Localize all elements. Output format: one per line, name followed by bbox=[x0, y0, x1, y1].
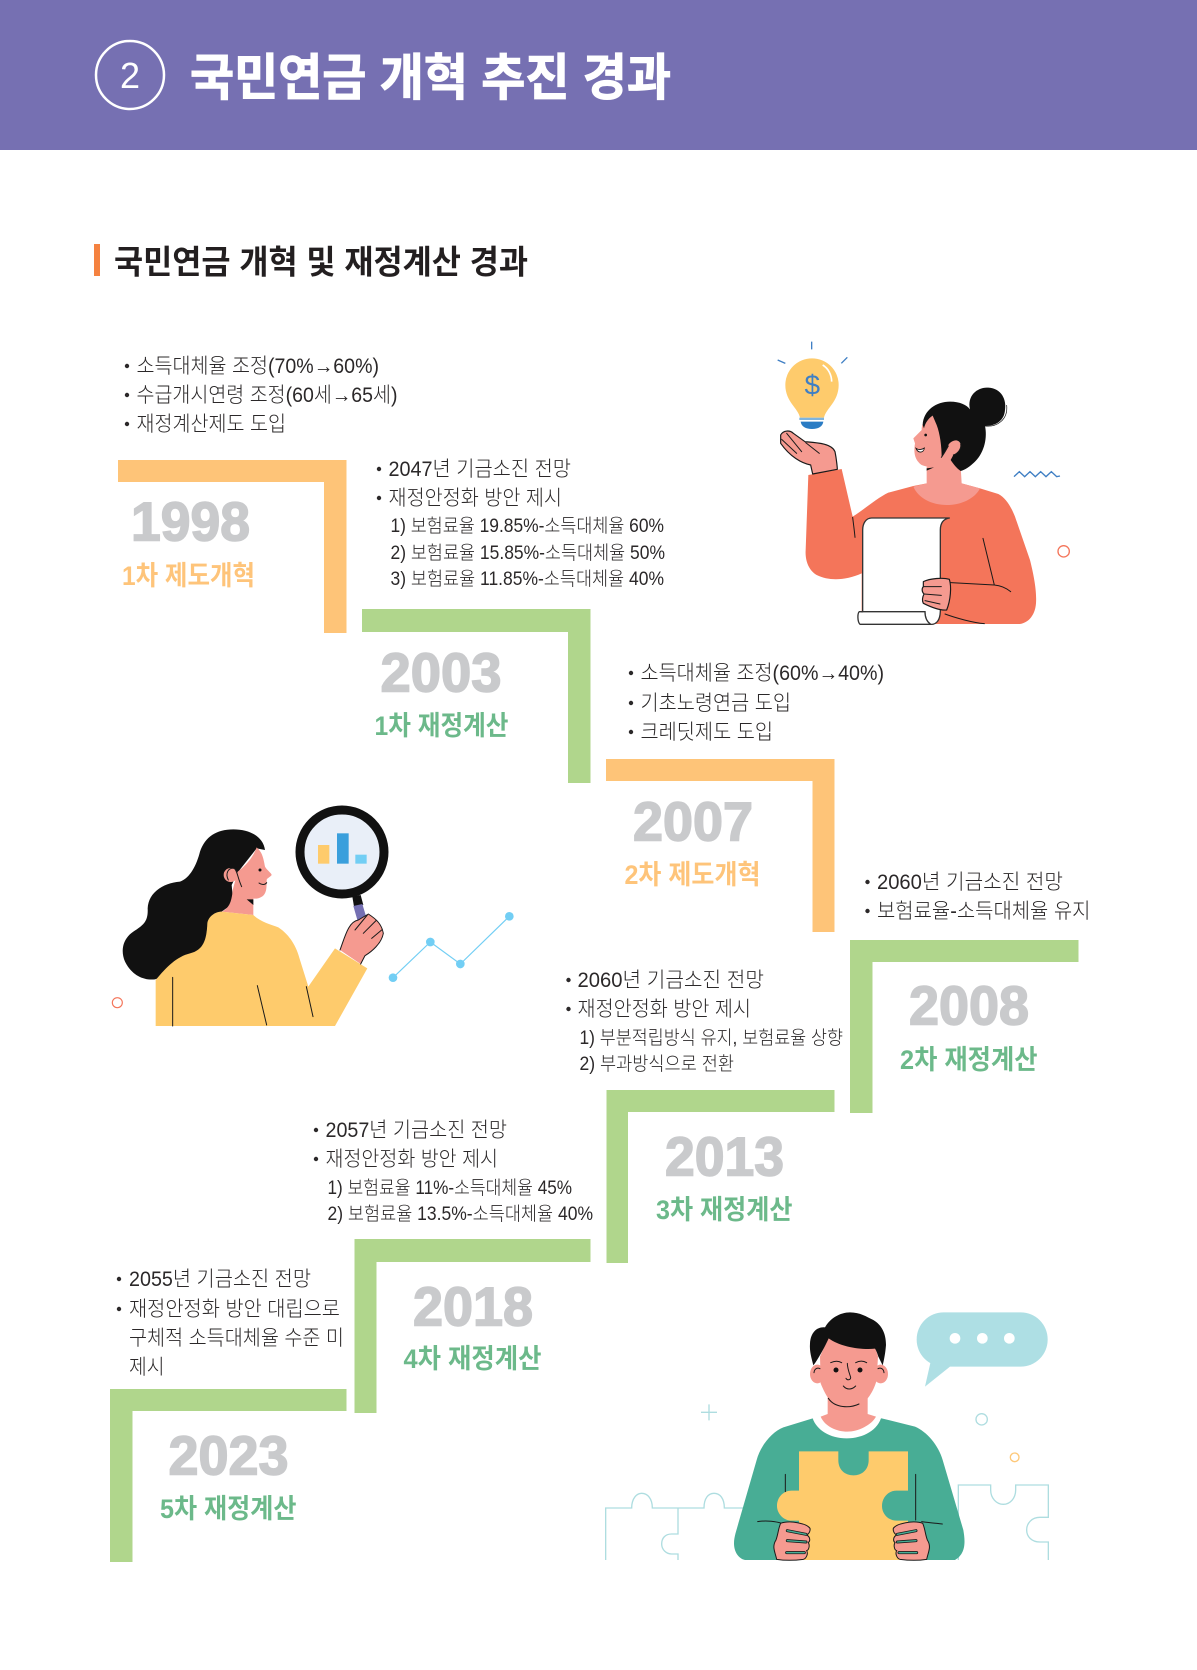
notes 2018: 재정안정화 방안 제시 bbox=[326, 1148, 498, 1171]
bracket 1998 bbox=[118, 460, 346, 633]
magnifier bbox=[300, 810, 384, 923]
label 2023: 5차 재정계산 bbox=[160, 1494, 297, 1524]
collar bbox=[813, 1415, 882, 1438]
label 2013: 3차 재정계산 bbox=[656, 1195, 793, 1225]
bracket 2018 bbox=[354, 1239, 590, 1413]
speech bubble bbox=[917, 1312, 1048, 1387]
page title: 국민연금 개혁 추진 경과 bbox=[190, 50, 671, 106]
notes 2008 bbox=[865, 871, 1090, 923]
hair bbox=[916, 388, 1007, 471]
illustration: woman with light bulb bbox=[778, 342, 1069, 624]
notes 2003: 1) 보험료율 19.85%-소득대체율 60% bbox=[390, 515, 664, 537]
notes 2003: 재정안정화 방안 제시 bbox=[388, 487, 562, 510]
notes 2018: 1) 보험료율 11%-소득대체율 45% bbox=[328, 1177, 572, 1199]
notes 2003: 2047년 기금소진 전망 bbox=[388, 458, 571, 481]
step: 2008 bbox=[850, 871, 1090, 1113]
bracket 2008 bbox=[850, 940, 1078, 1113]
year 2018: 2018 bbox=[413, 1276, 533, 1338]
notes 2007 bbox=[629, 662, 884, 744]
notes 2008: 2060년 기금소진 전망 bbox=[877, 871, 1063, 894]
section number badge bbox=[96, 41, 164, 109]
notes 1998: 재정계산제도 도입 bbox=[136, 413, 286, 436]
notes 2003: 3) 보험료율 11.85%-소득대체율 40% bbox=[390, 568, 664, 590]
step: 2003 bbox=[362, 458, 665, 783]
bracket 2023 bbox=[110, 1389, 346, 1562]
notes 2007: 소득대체율 조정(60%→40%) bbox=[640, 662, 884, 685]
notes 2013 bbox=[566, 969, 843, 1075]
notes 2023 bbox=[117, 1268, 344, 1379]
notes 2008: 보험료율-소득대체율 유지 bbox=[877, 900, 1090, 923]
label 1998: 1차 제도개혁 bbox=[122, 561, 255, 591]
right hand bbox=[893, 1522, 929, 1560]
notes 2023: 2055년 기금소진 전망 bbox=[129, 1268, 311, 1291]
label 2008: 2차 재정계산 bbox=[900, 1045, 1038, 1075]
puzzle outlines bbox=[606, 1485, 1048, 1560]
left hand bbox=[774, 1522, 810, 1560]
sweater lines bbox=[173, 977, 313, 1026]
circle accent bbox=[112, 998, 122, 1008]
step: 1998 bbox=[118, 355, 398, 633]
step: 2018 bbox=[314, 1119, 593, 1413]
label 2007: 2차 제도개혁 bbox=[624, 860, 760, 890]
notes 2013: 2060년 기금소진 전망 bbox=[578, 969, 764, 992]
year 1998: 1998 bbox=[131, 490, 250, 552]
plus accent bbox=[701, 1404, 717, 1420]
notes 2007: 기초노령연금 도입 bbox=[640, 692, 791, 715]
holding hand bbox=[922, 578, 951, 610]
section number badge: 2 bbox=[120, 55, 140, 96]
notes 1998: 수급개시연령 조정(60세→65세) bbox=[136, 384, 398, 407]
bracket 2003 bbox=[362, 609, 590, 783]
sweater bbox=[156, 912, 367, 1026]
head bbox=[810, 1312, 888, 1432]
label 2003: 1차 재정계산 bbox=[374, 711, 509, 741]
notes 2013: 2) 부과방식으로 전환 bbox=[580, 1053, 734, 1075]
notes 2013: 재정안정화 방안 제시 bbox=[578, 998, 751, 1021]
step: 2007 bbox=[606, 662, 884, 932]
teal circle accent bbox=[976, 1414, 987, 1425]
mini bar chart bbox=[318, 833, 367, 864]
sleeve lines bbox=[758, 1474, 942, 1524]
notes 2003: 2) 보험료율 15.85%-소득대체율 50% bbox=[390, 542, 665, 564]
neck and face bbox=[913, 415, 980, 505]
notes 1998 bbox=[125, 355, 398, 436]
bracket 2013 bbox=[606, 1090, 834, 1263]
icon: light bulb bbox=[778, 342, 847, 429]
hair bbox=[123, 829, 265, 980]
notes 2018: 2) 보험료율 13.5%-소득대체율 40% bbox=[328, 1203, 593, 1225]
header banner bbox=[0, 0, 1197, 150]
orange circle accent bbox=[1010, 1453, 1019, 1462]
notes 2023: 재정안정화 방안 대립으로 bbox=[129, 1298, 340, 1321]
year 2013: 2013 bbox=[665, 1126, 784, 1188]
illustration: man holding puzzle piece bbox=[606, 1312, 1048, 1560]
step: 2013 bbox=[566, 969, 843, 1263]
section heading: 국민연금 개혁 및 재정계산 경과 bbox=[114, 244, 528, 280]
illustration: woman with magnifier bbox=[112, 810, 514, 1026]
year 2023: 2023 bbox=[168, 1424, 288, 1486]
paper scroll bbox=[858, 518, 949, 624]
notes 2023: 구체적 소득대체율 수준 미 bbox=[129, 1327, 344, 1350]
notes 2003 bbox=[377, 458, 665, 590]
label 2018: 4차 재정계산 bbox=[404, 1344, 542, 1374]
notes 1998: 소득대체율 조정(70%→60%) bbox=[136, 355, 379, 378]
year 2003: 2003 bbox=[380, 642, 502, 704]
step: 2023 bbox=[110, 1268, 346, 1562]
raised hand bbox=[781, 431, 837, 474]
year 2007: 2007 bbox=[633, 790, 753, 852]
notes 2007: 크레딧제도 도입 bbox=[640, 721, 773, 744]
sweater bbox=[734, 1418, 965, 1560]
notes 2013: 1) 부분적립방식 유지, 보험료율 상향 bbox=[580, 1027, 843, 1049]
puzzle piece bbox=[777, 1451, 908, 1560]
notes 2018 bbox=[314, 1119, 593, 1225]
year 2008: 2008 bbox=[909, 974, 1029, 1036]
face and neck bbox=[222, 847, 272, 915]
notes 2018: 2057년 기금소진 전망 bbox=[326, 1119, 507, 1142]
notes 2023: 제시 bbox=[129, 1356, 164, 1379]
zigzag accent bbox=[1014, 472, 1060, 477]
sweater bbox=[806, 469, 1036, 624]
icon: light bulb: $ bbox=[805, 370, 821, 401]
circle accent bbox=[1058, 546, 1069, 557]
hand on magnifier bbox=[340, 914, 383, 964]
sleeve lines bbox=[853, 517, 1011, 624]
bracket 2007 bbox=[606, 759, 834, 932]
line chart bbox=[389, 912, 514, 982]
